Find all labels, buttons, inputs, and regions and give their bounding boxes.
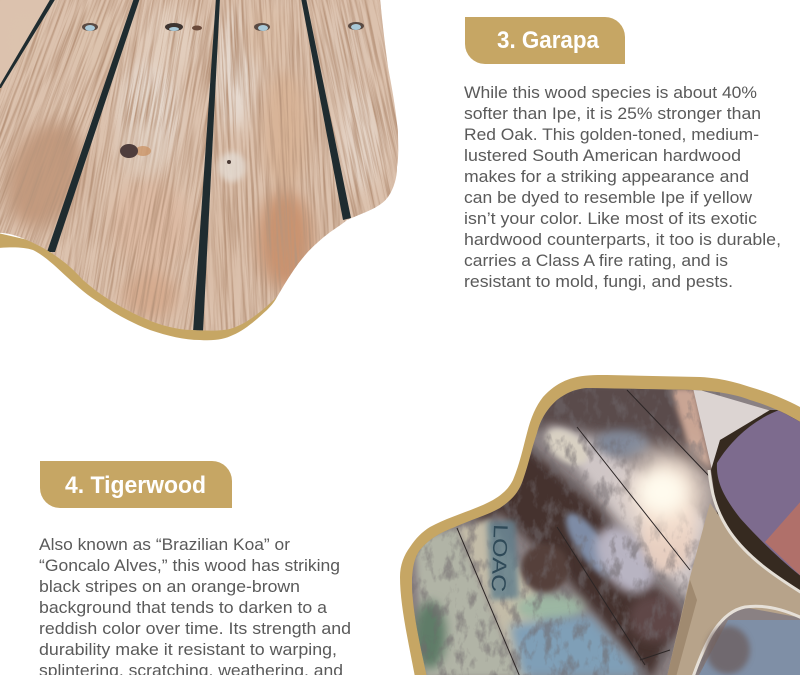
heading badge: 3. Garapa: 3. Garapa	[497, 27, 600, 54]
text block: Tigerwood description: background that tends to darken to a	[39, 598, 328, 617]
text block: Garapa description: hardwood counterparts, it too is durable,	[464, 230, 781, 249]
floor photo content	[400, 375, 800, 675]
text block: Garapa description	[464, 83, 781, 291]
text block: Garapa description: resistant to mold, fungi, and pests.	[464, 272, 733, 291]
wood photo content	[0, 0, 398, 331]
wood knots	[116, 122, 246, 182]
floor seams	[457, 390, 710, 675]
heading badge: 4. Tigerwood: 4. Tigerwood	[65, 472, 206, 499]
text block: Garapa description: isn’t your color. Like most of its exotic	[464, 209, 758, 228]
sunlight glare	[630, 453, 706, 537]
text block: Tigerwood description: black stripes on an orange-brown	[39, 577, 300, 596]
photo: distressed floor with chair	[400, 375, 800, 675]
gold border around floor photo	[400, 375, 800, 675]
floor distress texture	[400, 375, 720, 675]
plank gaps	[0, 0, 351, 332]
chair leg and seat	[667, 388, 800, 675]
text block: Garapa description: can be dyed to resemble Ipe if yellow	[464, 188, 753, 207]
text block: Garapa description: softer than Ipe, it is 25% stronger than	[464, 104, 761, 123]
text block: Tigerwood description: durability make it resistant to warping,	[39, 640, 337, 659]
text block: Tigerwood description: Also known as “Brazilian Koa” or	[39, 535, 290, 554]
stamped lettering box	[487, 520, 519, 600]
text block: Garapa description: Red Oak. This golden-toned, medium-	[464, 125, 759, 144]
text block: Tigerwood description: reddish color over time. Its strength and	[39, 619, 351, 638]
heading badge: 4. Tigerwood	[40, 461, 232, 508]
text block: Garapa description: carries a Class A fire rating, and is	[464, 251, 728, 270]
text block: Garapa description: makes for a striking appearance and	[464, 167, 749, 186]
deck screw holes	[82, 22, 364, 31]
text block: Tigerwood description: “Goncalo Alves,” this wood has striking	[39, 556, 340, 575]
text block: Tigerwood description	[39, 535, 351, 675]
photo: weathered wood deck planks	[0, 0, 398, 340]
gold border under wood photo	[0, 233, 277, 340]
text block: Garapa description: While this wood species is about 40%	[464, 83, 757, 102]
text block: Garapa description: lustered South American hardwood	[464, 146, 741, 165]
stamped lettering box: LOAC	[487, 524, 511, 593]
wood grain texture	[0, 0, 398, 330]
heading badge: 3. Garapa	[465, 17, 625, 64]
